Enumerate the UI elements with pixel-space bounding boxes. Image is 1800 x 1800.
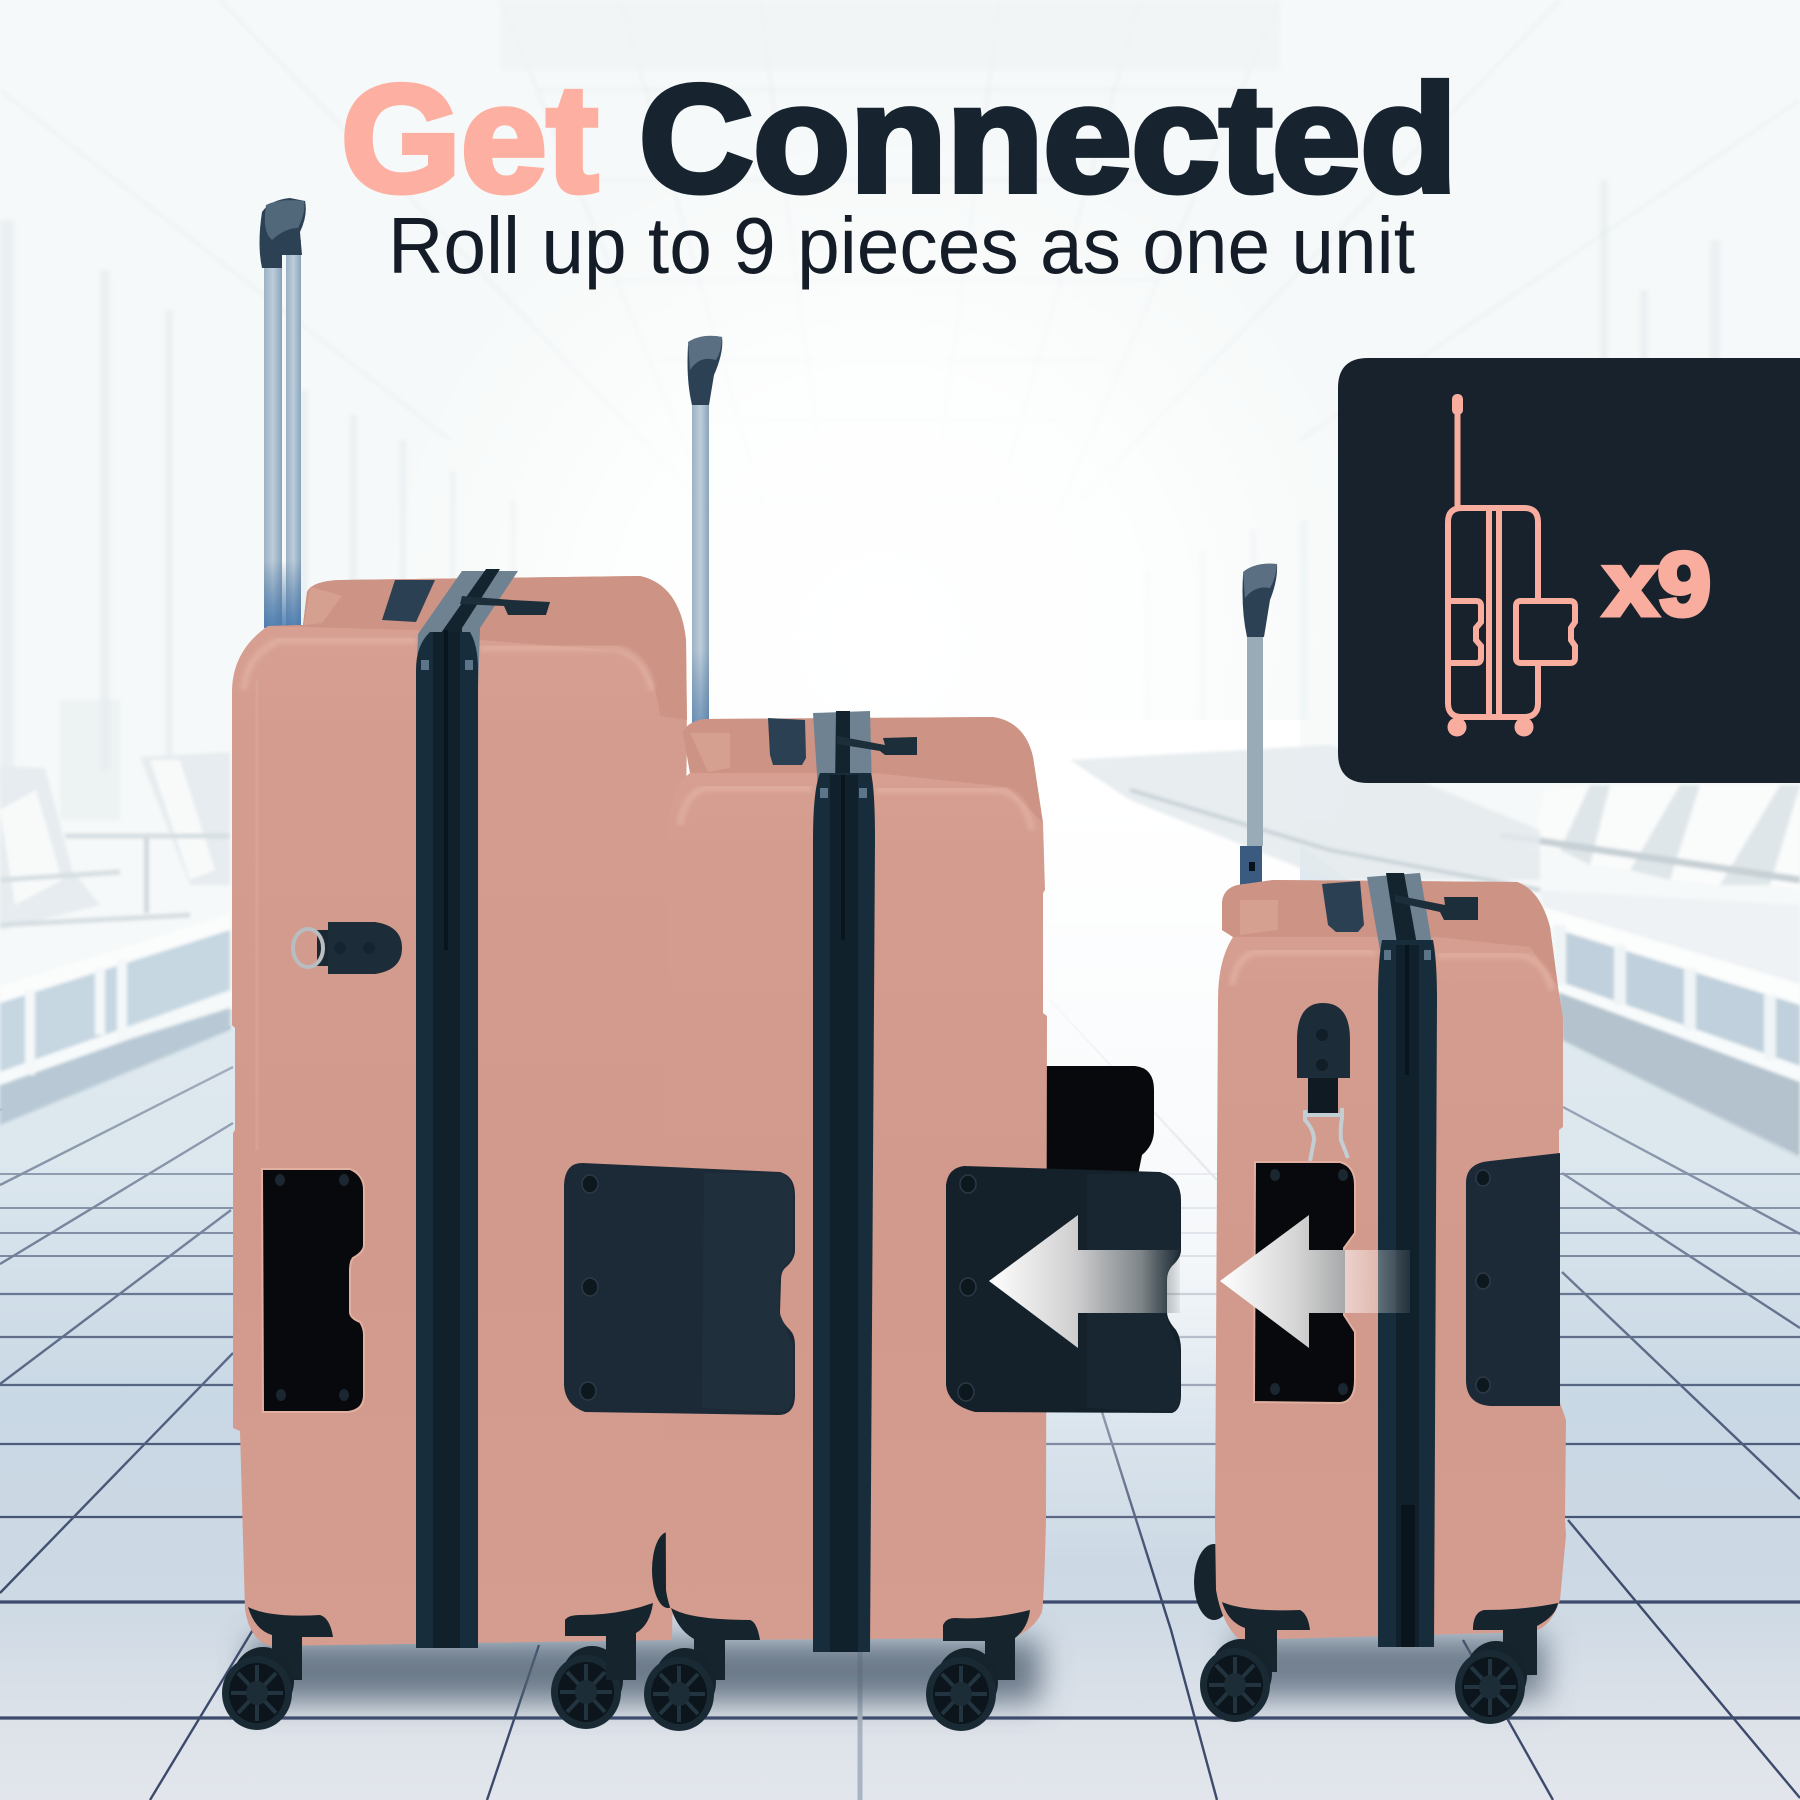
medium suitcase telescopic handle bbox=[688, 336, 722, 772]
small suitcase wheel housings bbox=[1222, 1602, 1558, 1675]
hall windows and ceiling bbox=[0, 0, 1800, 780]
small suitcase zipper band bbox=[1367, 873, 1437, 1647]
ground shadow under suitcases bbox=[250, 1636, 1545, 1702]
large suitcase top handle bbox=[382, 580, 435, 622]
right seats bbox=[1530, 785, 1800, 890]
large suitcase shell bbox=[232, 576, 687, 1646]
subtitle: Roll up to 9 pieces as one unit bbox=[388, 201, 1415, 290]
large suitcase bbox=[222, 198, 687, 1730]
small suitcase top handle bbox=[1322, 881, 1364, 932]
arrow: connect small suitcase bbox=[1220, 1215, 1410, 1348]
small suitcase back wheel bbox=[1194, 1544, 1234, 1620]
small suitcase telescopic handle bbox=[1240, 564, 1277, 938]
connector plate on medium bbox=[946, 1166, 1181, 1413]
icon: suitcase with connectors bbox=[1448, 394, 1575, 736]
medium suitcase zip pull bbox=[837, 736, 917, 755]
right bench bbox=[1555, 925, 1800, 1066]
medium connector plate behind bbox=[1040, 1066, 1154, 1175]
floor tiles bbox=[0, 800, 1800, 1800]
small suitcase shell bbox=[1215, 880, 1566, 1640]
x9 label: x9 bbox=[1604, 535, 1711, 635]
small suitcase front wheels bbox=[1200, 1639, 1527, 1724]
medium suitcase front wheels bbox=[644, 1648, 998, 1731]
bright corridor bbox=[960, 720, 1300, 1560]
small suitcase bbox=[1194, 564, 1566, 1724]
large suitcase connector recess bbox=[262, 1169, 364, 1412]
large suitcase zip pull bbox=[460, 596, 550, 615]
small suitcase connector recess bbox=[1254, 1162, 1355, 1403]
small suitcase zip pull bbox=[1395, 895, 1478, 920]
medium suitcase bbox=[644, 336, 1047, 1731]
medium suitcase wheel housings bbox=[671, 1608, 1030, 1680]
medium suitcase zipper band bbox=[813, 711, 875, 1652]
medium suitcase shell bbox=[664, 717, 1047, 1640]
large suitcase wheel housings bbox=[248, 1603, 653, 1680]
medium suitcase top handle bbox=[768, 718, 806, 765]
large suitcase front wheel bbox=[222, 1647, 294, 1730]
large suitcase back wheels bbox=[551, 1646, 623, 1729]
arrow: connect medium plate bbox=[989, 1215, 1180, 1348]
left bench bbox=[0, 928, 230, 1072]
large suitcase zipper band bbox=[416, 569, 518, 1648]
title: Get bbox=[341, 54, 598, 224]
small suitcase hanging strap and hook bbox=[1297, 1003, 1350, 1161]
left seats bbox=[0, 700, 230, 930]
small suitcase connector plate bbox=[1466, 1153, 1560, 1406]
connector plate between large and medium bbox=[564, 1163, 795, 1415]
ring strap bbox=[293, 922, 402, 974]
large suitcase telescopic handle bbox=[260, 198, 306, 628]
seating rows and glass rails bbox=[0, 700, 1800, 1157]
title: Connected bbox=[639, 54, 1457, 224]
medium suitcase back wheel bbox=[652, 1532, 684, 1608]
panel: x9 badge bbox=[1338, 358, 1800, 783]
